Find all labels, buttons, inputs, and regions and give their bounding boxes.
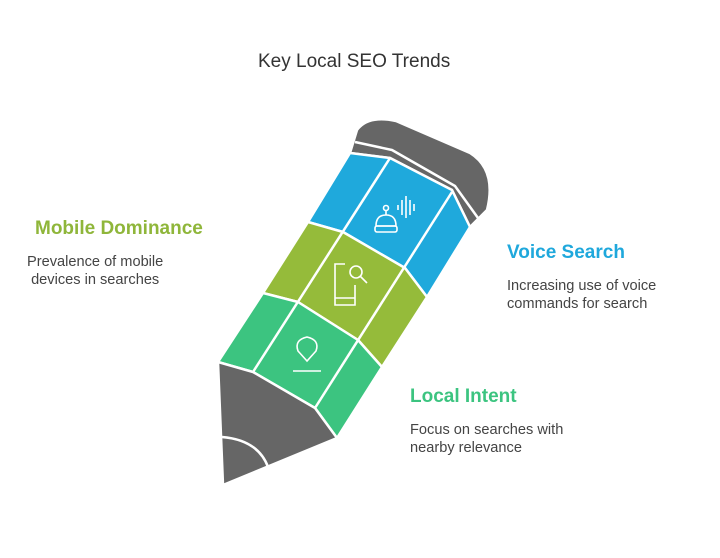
text: voice search (507, 278, 656, 312)
icon: location pin (293, 337, 321, 371)
heading: mobile dominance: Mobile Dominance (35, 218, 203, 239)
icon: voice robot (375, 196, 414, 232)
heading: voice search: Voice Search (507, 242, 625, 263)
text: mobile dominance: devices in searches (31, 272, 159, 288)
icon: phone search (335, 264, 367, 305)
text: local intent (410, 422, 563, 456)
text: mobile dominance (27, 254, 163, 288)
text: mobile dominance: Prevalence of mobile (27, 254, 163, 270)
pencil tip (218, 362, 337, 485)
eraser (350, 119, 490, 227)
heading: local intent: Local Intent (410, 386, 517, 407)
segment: local intent (green) (218, 293, 382, 438)
segment: voice search (blue) (308, 153, 470, 297)
ferrule lines (355, 142, 478, 218)
text: voice search: Increasing use of voice (507, 278, 656, 294)
title: Key Local SEO Trends (258, 51, 450, 72)
segment: mobile dominance (olive) (263, 222, 427, 367)
text: local intent: nearby relevance (410, 440, 522, 456)
text: voice search: commands for search (507, 296, 647, 312)
text: local intent: Focus on searches with (410, 422, 563, 438)
